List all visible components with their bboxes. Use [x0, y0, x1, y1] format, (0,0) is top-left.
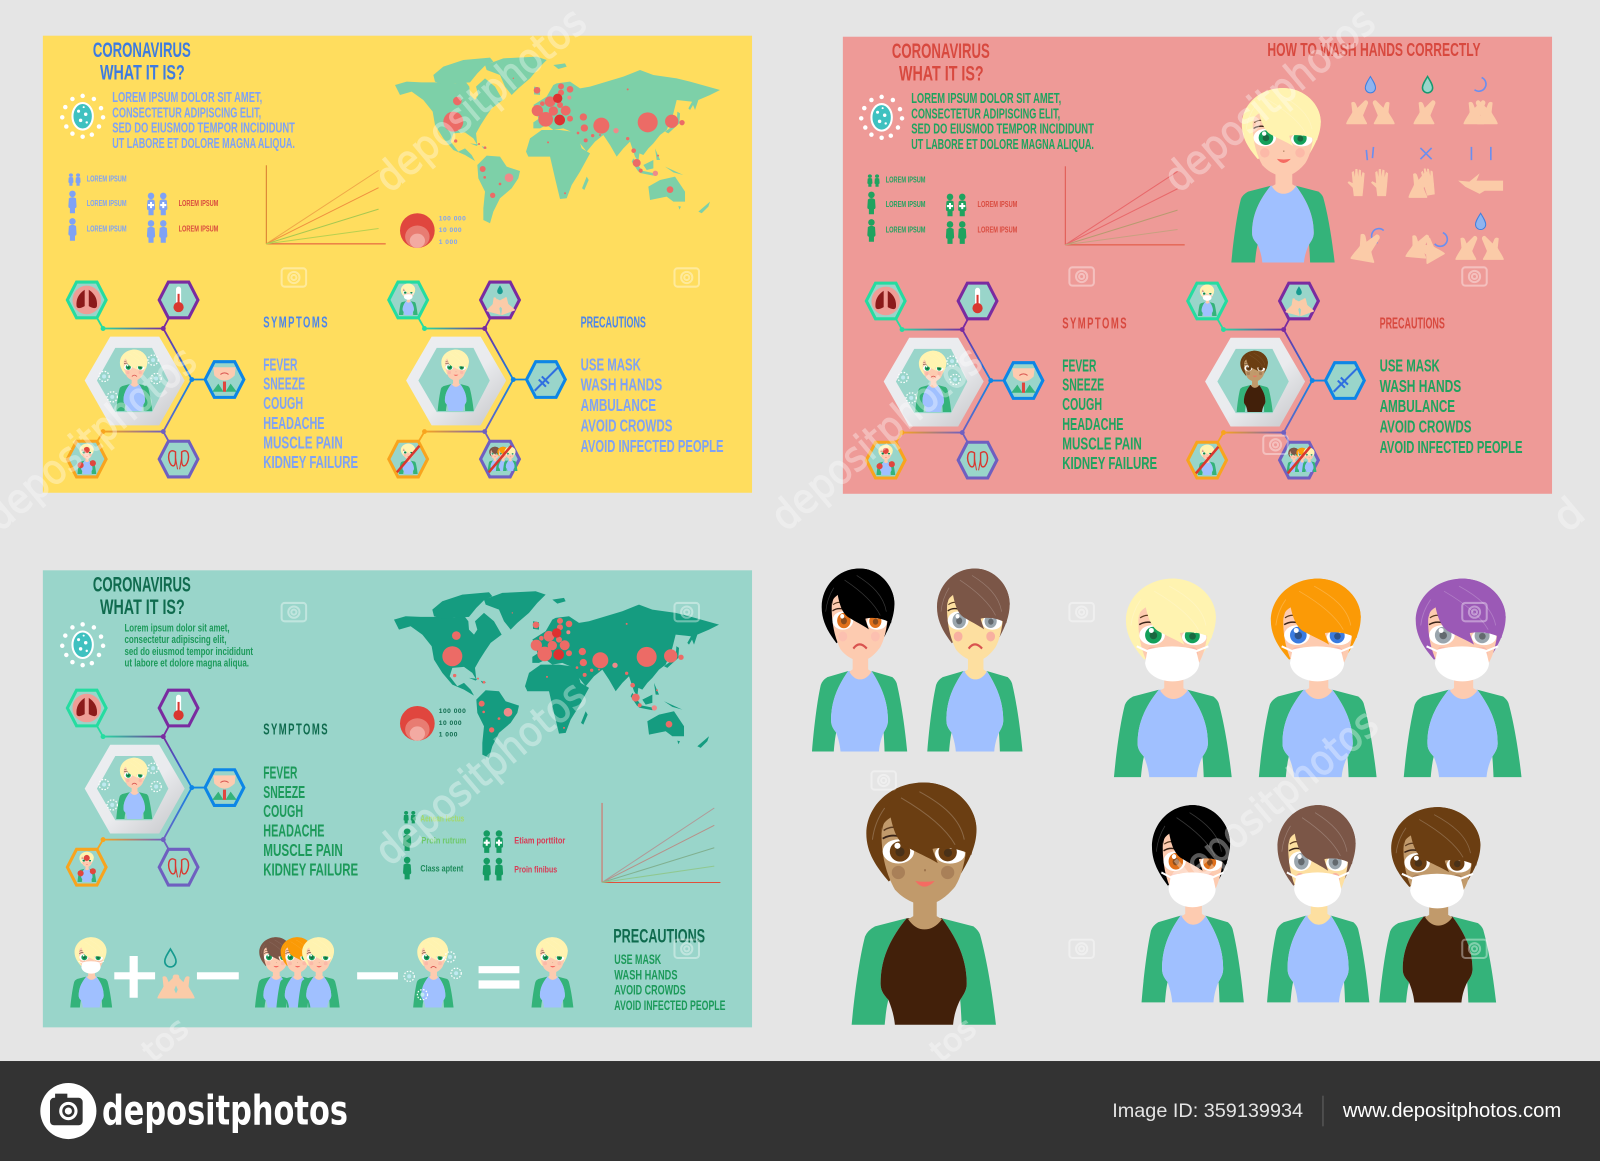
title: [892, 40, 990, 86]
equals sign: [479, 966, 519, 989]
symptoms list: MUSCLE PAIN: [263, 840, 343, 860]
title: CORONAVIRUS: [93, 574, 191, 597]
precautions hex diagram: [1188, 283, 1364, 478]
watermarks: depositphotos: [1157, 699, 1387, 903]
intro text: SED DO EIUSMOD TEMPOR INCIDIDUNT: [911, 122, 1094, 138]
intro text: LOREM IPSUM DOLOR SIT AMET,: [112, 90, 262, 106]
footer bar: [0, 1061, 1600, 1161]
symptoms list: [1062, 355, 1157, 473]
panel: pink coronavirus infographic: [843, 37, 1552, 494]
character: masked brown hair: [1267, 805, 1369, 1002]
people statistics: LOREM IPSUM: [179, 198, 218, 208]
symptoms list: [263, 354, 358, 472]
people statistics: LOREM IPSUM: [179, 224, 218, 234]
how to wash hands heading: HOW TO WASH HANDS CORRECTLY: [1267, 39, 1481, 60]
logo wordmark: depositphotos: [102, 1086, 348, 1134]
symptoms list: KIDNEY FAILURE: [1062, 453, 1157, 473]
world map with case bubbles: [394, 591, 719, 758]
minus sign: [357, 972, 398, 979]
legend: bubble sizes: 1 000: [439, 239, 458, 246]
people statistics: Etiam porttitor: [514, 836, 566, 846]
precautions heading: PRECAUTIONS: [1380, 316, 1445, 333]
title: [93, 39, 191, 85]
precautions list: WASH HANDS: [1380, 376, 1461, 396]
precautions list: USE MASK: [614, 952, 661, 967]
watermarks: tos: [923, 1011, 983, 1069]
character: masked purple hair: [1404, 579, 1521, 777]
precautions list: [1380, 355, 1522, 457]
intro text: Lorem ipsum dolor sit amet,: [124, 623, 230, 635]
people statistics: [403, 811, 566, 880]
people statistics: LOREM IPSUM: [87, 224, 127, 234]
intro text: [911, 91, 1094, 153]
symptoms heading: SYMPTOMS: [1062, 314, 1127, 332]
intro text: CONSECTETUR ADIPISCING ELIT,: [112, 105, 261, 121]
intro text: [112, 90, 295, 152]
character: healthy person: [532, 937, 573, 1008]
line chart: [602, 803, 720, 882]
symptoms list: FEVER: [1062, 355, 1097, 375]
symptoms list: KIDNEY FAILURE: [263, 859, 358, 879]
character: masked black hair: [1142, 805, 1244, 1002]
minus sign: [197, 972, 239, 979]
symptoms list: COUGH: [263, 801, 303, 821]
people statistics: LOREM IPSUM: [886, 225, 926, 235]
intro text: UT LABORE ET DOLORE MAGNA ALIQUA.: [112, 136, 295, 152]
character: masked orange hair: [1259, 579, 1377, 777]
precautions hex diagram: [389, 282, 565, 477]
precautions list: AMBULANCE: [581, 395, 656, 415]
precautions list: WASH HANDS: [581, 375, 662, 395]
title: WHAT IT IS?: [100, 62, 185, 85]
people statistics: Aenean lectus: [420, 813, 464, 823]
equation: mask plus hand washing minus crowds minus virus equals healthy: [70, 937, 573, 1008]
symptoms list: COUGH: [1062, 394, 1102, 414]
people statistics: LOREM IPSUM: [886, 175, 926, 185]
watermarks: depositphotos: [365, 671, 596, 875]
symptoms list: HEADACHE: [1062, 414, 1123, 434]
precautions list: [614, 952, 726, 1013]
panel: yellow coronavirus infographic: [43, 36, 752, 493]
symptoms hex diagram: [67, 690, 244, 885]
precautions list: AVOID CROWDS: [614, 983, 686, 998]
precautions list: [581, 354, 723, 456]
precautions list: WASH HANDS: [614, 967, 678, 982]
icon: virus: [60, 94, 105, 139]
people statistics: [867, 174, 1017, 244]
symptoms hex diagram: [866, 283, 1043, 478]
people statistics: Proin finibus: [514, 864, 557, 874]
people statistics: LOREM IPSUM: [87, 198, 127, 208]
precautions heading: PRECAUTIONS: [613, 926, 705, 948]
symptoms list: HEADACHE: [263, 821, 324, 841]
intro text: SED DO EIUSMOD TEMPOR INCIDIDUNT: [112, 121, 295, 137]
precautions list: AVOID CROWDS: [581, 416, 672, 436]
precautions list: AVOID INFECTED PEOPLE: [1380, 437, 1522, 457]
people statistics: LOREM IPSUM: [978, 199, 1017, 209]
icon: drop and washed hands: [158, 949, 194, 998]
image id: Image ID: 359139934: [1112, 1100, 1303, 1122]
people statistics: LOREM IPSUM: [87, 174, 127, 184]
icon: depositphotos camera logo: [40, 1083, 96, 1139]
characters: crowd of three: [255, 937, 340, 1008]
character: sad black hair: [812, 569, 907, 751]
intro text: [124, 623, 253, 670]
character: masked blonde: [1114, 579, 1232, 777]
character: masked dark-skinned: [1379, 807, 1496, 1002]
icon: virus: [60, 622, 105, 667]
character: sad brown hair: [927, 569, 1023, 751]
title: CORONAVIRUS: [93, 39, 191, 62]
symptoms list: MUSCLE PAIN: [263, 432, 343, 452]
line chart: [1065, 166, 1185, 245]
intro text: CONSECTETUR ADIPISCING ELIT,: [911, 106, 1060, 122]
people statistics: LOREM IPSUM: [978, 225, 1017, 235]
title: CORONAVIRUS: [892, 40, 990, 63]
legend: bubble sizes: 100 000: [439, 215, 466, 222]
legend: bubble sizes: 100 000: [439, 708, 466, 715]
plus sign: [114, 956, 155, 998]
world map with case bubbles: [395, 57, 720, 223]
hand washing steps: [1347, 77, 1503, 264]
title: WHAT IT IS?: [100, 596, 185, 619]
precautions heading: PRECAUTIONS: [581, 314, 646, 331]
symptoms hex diagram: [67, 282, 244, 477]
title: [93, 574, 191, 619]
symptoms list: COUGH: [263, 393, 303, 413]
precautions list: USE MASK: [1380, 355, 1440, 375]
character: blonde woman: [1231, 88, 1335, 262]
intro text: ut labore et dolore magna aliqua.: [124, 658, 249, 670]
website: www.depositphotos.com: [1342, 1100, 1561, 1122]
watermarks: depositphotos: [761, 336, 991, 540]
characters sheet: [812, 569, 1521, 1025]
symptoms list: FEVER: [263, 354, 298, 374]
symptoms list: FEVER: [263, 762, 298, 782]
symptoms list: SNEEZE: [1062, 375, 1104, 395]
character: sick person with viruses: [404, 937, 461, 1008]
legend: bubble sizes: [400, 706, 466, 741]
legend: bubble sizes: 10 000: [439, 227, 462, 234]
symptoms list: KIDNEY FAILURE: [263, 452, 358, 472]
intro text: consectetur adipiscing elit,: [124, 634, 227, 646]
precautions list: AVOID INFECTED PEOPLE: [614, 998, 726, 1013]
character: masked person: [70, 937, 112, 1008]
symptoms list: SNEEZE: [263, 374, 305, 394]
people statistics: Proin rutrum: [421, 836, 466, 846]
symptoms list: MUSCLE PAIN: [1062, 433, 1142, 453]
watermarks: tos: [136, 1011, 196, 1069]
people statistics: Class aptent: [420, 863, 463, 873]
panel: teal coronavirus infographic: [43, 570, 752, 1027]
legend: bubble sizes: 1 000: [439, 732, 458, 739]
intro text: UT LABORE ET DOLORE MAGNA ALIQUA.: [911, 137, 1094, 153]
symptoms list: [263, 762, 358, 879]
title: WHAT IT IS?: [899, 63, 984, 86]
intro text: sed do eiusmod tempor incididunt: [124, 646, 253, 658]
character: large dark-skinned: [852, 783, 996, 1025]
people statistics: [68, 173, 218, 243]
symptoms heading: SYMPTOMS: [263, 720, 328, 738]
icon: virus: [859, 95, 904, 140]
symptoms list: SNEEZE: [263, 782, 305, 802]
symptoms list: HEADACHE: [263, 413, 324, 433]
precautions list: AVOID CROWDS: [1380, 417, 1471, 437]
precautions list: USE MASK: [581, 354, 641, 374]
watermarks: d: [1543, 488, 1594, 541]
precautions list: AVOID INFECTED PEOPLE: [581, 436, 723, 456]
line chart: [266, 165, 386, 244]
people statistics: LOREM IPSUM: [886, 199, 926, 209]
symptoms heading: SYMPTOMS: [263, 313, 328, 331]
precautions list: AMBULANCE: [1380, 396, 1455, 416]
intro text: LOREM IPSUM DOLOR SIT AMET,: [911, 91, 1061, 107]
legend: bubble sizes: [400, 213, 466, 248]
legend: bubble sizes: 10 000: [439, 720, 462, 727]
